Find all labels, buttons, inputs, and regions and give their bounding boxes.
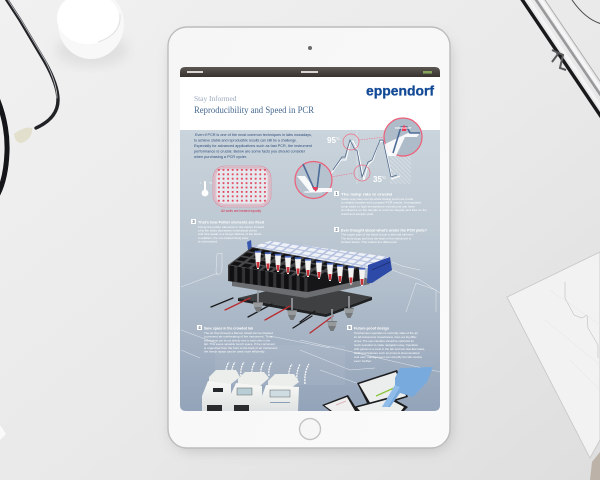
eppendorf logo: eppendorf	[366, 82, 434, 98]
screws	[253, 290, 354, 331]
step 3: Peltier elements: Fixing the peltier elements in the center instead	[198, 225, 264, 229]
small tablet top	[357, 370, 408, 408]
tablet	[168, 27, 452, 452]
step 5: future proof: 5	[348, 325, 351, 330]
95 degree label: 95	[327, 136, 336, 145]
step 3: Peltier elements: of at the sides decreases mechanical stress	[198, 229, 257, 233]
step 5: future proof	[347, 325, 425, 363]
step 1: ramp rate: result and sample yield.	[341, 212, 374, 216]
cables	[211, 298, 333, 333]
heat map of wells	[213, 166, 271, 207]
measured curve	[333, 140, 397, 177]
step 5: future proof: Future-proof design	[354, 326, 390, 330]
glove	[382, 367, 433, 407]
step 5: future proof: touch operation to make navigation easy. Operation	[354, 343, 418, 347]
intro text: Even if PCR is one of the most common techniques in labs nowadays,	[195, 133, 312, 137]
camera	[308, 46, 312, 50]
note corner at left edge	[0, 425, 6, 440]
lower plate	[238, 283, 372, 317]
step 4: save space: Save space in the crowded lab	[204, 326, 254, 330]
step 3: Peltier elements: 3	[192, 219, 195, 224]
step 4: save space: is organized from the front to the back of an instrument,	[204, 346, 278, 350]
step 5: future proof: for lab instruments. Nevertheless, there are big differ-	[354, 335, 417, 339]
thermometer icon: I	[200, 181, 201, 185]
step 2: under the plate	[334, 227, 428, 244]
step 4: save space: the bench space can be used more efficiently.	[204, 350, 265, 354]
intro text: when purchasing a PCR cycler.	[194, 155, 247, 159]
step 2: under the plate: The upper part of the block is just a thermal element.	[341, 232, 414, 236]
step 4: save space	[197, 325, 278, 354]
tablet body	[168, 27, 450, 448]
intro text: Especially for advanced applications such as fast PCR, the instrument	[194, 144, 312, 148]
step 5: future proof: Touchscreen operation is currently state of the art	[354, 331, 418, 335]
home button	[300, 418, 320, 440]
step 5: future proof: and user management can simplify the lab routine	[354, 355, 422, 359]
pen and clip	[521, 0, 600, 118]
PCR tubes	[255, 251, 365, 286]
step 3: Peltier elements: and thus leads to a longer lifetime of the block.	[198, 232, 262, 236]
step 1: ramp rate: Stable ramp rates over the whole heating period are crucial	[341, 197, 413, 201]
step 4: save space: to prevent air-overheating of the instrument. Thus,	[204, 335, 273, 339]
step 3: Peltier elements: is minimized.	[198, 239, 218, 243]
step 5: future proof: with gloves is a must in the lab and two-fast-fast tasks,	[354, 347, 425, 351]
temperature profile chart	[295, 118, 422, 198]
thermal cyclers	[202, 370, 299, 411]
overshoot magnifier: OVERSHOOT	[395, 126, 412, 130]
step 2: under the plate: Ever thought about what's under the PCR plate?	[341, 228, 428, 232]
touchscreen tablets and gloved hand	[322, 367, 433, 411]
thermometer icon: °C	[209, 181, 213, 185]
ECG paper	[507, 252, 600, 480]
hatched region	[390, 150, 411, 184]
status bar	[180, 67, 440, 77]
step 1: ramp rate: The ramp rate is crucial	[341, 192, 392, 196]
undershoot magnifier: UNDERSHOOT	[304, 190, 323, 194]
small tablet right	[353, 397, 408, 411]
content panel	[180, 129, 440, 411]
faint lab columns	[215, 345, 345, 385]
middle plate	[232, 279, 370, 298]
small circles	[343, 134, 359, 150]
white header	[180, 77, 440, 130]
stethoscope	[0, 0, 58, 194]
step 3: Peltier elements: In addition, the non-heated fixing area	[198, 236, 248, 240]
heat map caption: All wells are heated equally	[221, 209, 261, 213]
step 3: Peltier elements	[191, 219, 265, 243]
pill jar	[56, 0, 128, 66]
step 1: ramp rate: to reliably transfer and compare PCR results. Unregulated	[341, 201, 421, 205]
step 1: ramp rate: an influence on the sample or enzyme integrity and thus on the	[341, 208, 427, 212]
step 5: future proof: even further.	[354, 359, 372, 363]
step 2: under the plate: The technology and thus the heart of the instrument is	[341, 236, 411, 240]
step 4: save space: instruments can be put directly next to each other in the	[204, 338, 270, 342]
exploded PCR block	[211, 240, 392, 333]
small tablet left	[322, 395, 358, 411]
intro text: performance is crucial. Below are some facts you should consider	[194, 150, 306, 154]
step 2: under the plate: located below. This makes the difference!	[341, 240, 397, 244]
thermometer icon	[200, 181, 213, 196]
step 5: future proof: ences. The user interface should be optimized for	[354, 339, 414, 343]
white target curve	[331, 141, 400, 180]
title: Reproducibility and Speed in PCR	[194, 105, 314, 115]
step 5: future proof: additional features such as protocol documentation	[354, 351, 420, 355]
intro text	[194, 133, 312, 159]
tablet shadow	[170, 34, 452, 452]
95 degree label: °C	[336, 137, 340, 141]
black wells	[228, 247, 362, 292]
screen	[180, 67, 440, 411]
35 degree label: °C	[382, 176, 386, 180]
step 3: Peltier elements: That's how Peltier elements are fixed	[198, 220, 265, 224]
step 1: ramp rate: ramp rates or high temperature overshoots can have	[341, 204, 415, 208]
sketch lines and lab outline	[181, 253, 440, 395]
cycler right	[262, 374, 299, 411]
zoom connectors	[331, 137, 385, 177]
intro text: to achieve stable and reproducible results can still be a challenge.	[194, 138, 297, 142]
section label: Stay Informed	[194, 94, 237, 103]
blue frame and sample wells	[247, 240, 392, 283]
step 1: ramp rate	[334, 191, 427, 216]
cycler left	[202, 370, 240, 411]
35 degree label: 35	[373, 175, 382, 184]
step 4: save space: 4	[198, 325, 201, 330]
step 4: save space: The air flow through a Mercer shield can be blocked	[204, 331, 273, 335]
step 1: ramp rate: 1	[335, 191, 338, 196]
axis	[356, 131, 358, 184]
airflow arrows	[226, 362, 309, 384]
step 2: under the plate: 2	[335, 227, 338, 232]
cycler middle	[230, 372, 269, 411]
step 4: save space: lab. This saves valuable bench space. If the instrument	[204, 342, 275, 346]
